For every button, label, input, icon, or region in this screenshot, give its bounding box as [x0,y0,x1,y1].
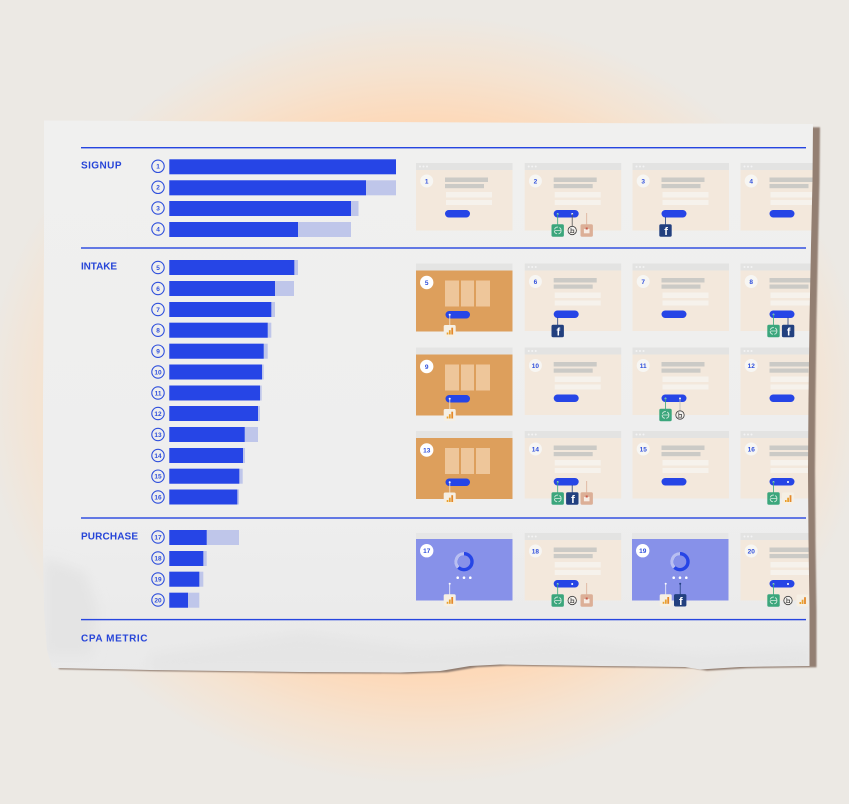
card 20 [740,533,837,607]
card 8 [740,264,810,338]
card 1: 1 [425,178,429,185]
card 14: 14 [532,446,539,453]
card 3: 3 [641,178,645,185]
card 6: 6 [534,279,538,286]
card 3 [632,163,729,238]
bar chart: signup: 2 [156,185,160,192]
card 11: 11 [640,363,647,370]
icon: facebook: f [787,327,791,339]
card 17 [416,533,512,606]
card 9: 9 [425,364,429,371]
icon: box [580,594,593,607]
bar chart: intake: 14 [154,453,162,460]
card 4 [740,163,812,230]
card 5 [416,264,512,337]
card 17: 17 [423,548,431,555]
icon: analytics [444,492,456,504]
bar chart: intake: 16 [154,494,162,501]
bar chart: purchase: 18 [154,555,162,562]
card 7: 7 [641,279,645,286]
card 13: 13 [423,447,431,454]
bar chart: intake: 5 [156,265,160,272]
card 5: 5 [425,280,429,287]
icon: box [580,224,593,237]
icon: green sync [659,409,672,421]
icon: facebook: f [571,494,575,506]
icon: green sync [552,594,564,607]
bar chart: purchase: 20 [154,597,162,604]
heading: purchase: PURCHASE [81,532,138,543]
bar chart: intake: 15 [154,474,162,480]
icon: jr circle [568,226,576,235]
card 20: 20 [748,548,755,555]
bar chart: intake: 6 [156,286,160,293]
icon: green sync [552,492,564,505]
card 14 [525,431,621,506]
bar chart: purchase [152,530,239,608]
bar chart: signup: 3 [156,205,160,212]
card 13 [416,431,512,504]
bar chart: signup: 1 [156,164,160,171]
card 2: 2 [534,178,538,185]
card 12: 12 [748,363,755,370]
card 16 [740,431,808,505]
icon: analytics [444,325,456,337]
card 15 [632,431,729,498]
icon: jr circle [784,596,792,605]
card 8: 8 [749,279,753,286]
card 7 [632,264,729,331]
card 2 [525,163,621,237]
icon: green sync [767,325,780,337]
paper shadow [50,124,820,674]
icon: jr circle [676,411,684,419]
icon: jr circle [568,596,576,605]
icon: analytics [660,594,672,606]
bar chart: intake [152,260,298,504]
card 10 [525,348,621,415]
heading: cpa metric: CPA METRIC [81,634,148,645]
icon: analytics [796,594,808,606]
card 19 [632,533,728,608]
bar chart: purchase: 17 [154,534,162,541]
bar chart: signup [152,159,396,237]
icon: green sync [767,594,780,607]
bar chart: intake: 13 [154,432,162,439]
card 18 [525,533,621,607]
icon: green sync [552,224,564,237]
icon: analytics [782,492,794,504]
heading: intake: INTAKE [81,262,117,273]
card 4: 4 [749,178,753,185]
card 19: 19 [639,548,647,555]
card 15: 15 [640,446,647,453]
card 6 [525,264,621,339]
bar chart: intake: 7 [156,307,160,314]
divider lines [81,147,806,620]
icon: box [580,492,593,505]
icon: analytics [444,594,456,606]
heading: signup: SIGNUP [81,161,122,172]
bar chart: signup: 4 [156,226,160,233]
icon: facebook: f [664,226,668,238]
card 12 [740,348,809,415]
bar chart: intake: 12 [154,411,162,418]
card 10: 10 [532,363,539,370]
bar chart: intake: 10 [154,369,162,376]
bar chart: intake: 11 [155,390,162,397]
bar chart: intake: 8 [156,328,160,334]
paper sheet [30,110,837,680]
card 1 [416,163,512,230]
card 18: 18 [532,548,539,555]
icon: facebook: f [556,327,560,339]
card 16: 16 [748,446,755,453]
icon: facebook: f [679,596,683,608]
card 11 [632,348,729,421]
icon: analytics [444,409,456,421]
bar chart: intake: 9 [156,348,160,356]
card 9 [416,348,512,421]
icon: green sync [767,492,780,505]
bar chart: purchase: 19 [154,576,162,583]
